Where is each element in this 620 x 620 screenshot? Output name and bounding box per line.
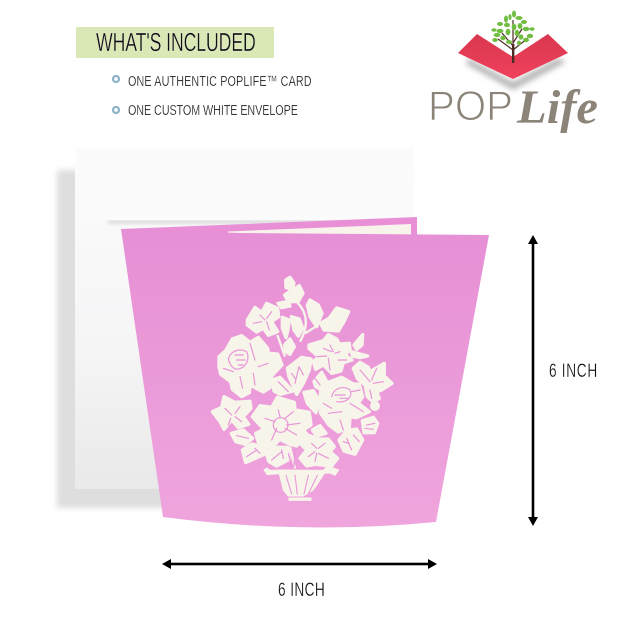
flower: bottom right: [300, 436, 338, 466]
envelope shadow: [57, 170, 397, 508]
arrow: width: [162, 559, 437, 569]
label: width 6 inch: 6 INCH: [278, 579, 325, 601]
right bud and leaf: [339, 417, 378, 454]
flower: far right: [353, 362, 392, 409]
flower: top left: [247, 303, 279, 335]
list item: envelope: ONE CUSTOM WHITE ENVELOPE: [128, 101, 298, 118]
rose: left: [219, 336, 282, 397]
envelope: [75, 147, 414, 489]
big flower: bottom centre: [252, 397, 311, 448]
label: height 6 inch: 6 INCH: [549, 360, 597, 382]
flower: left bottom: [212, 397, 251, 429]
heading: what's included: WHAT'S INCLUDED: [96, 28, 256, 57]
stems: [277, 302, 318, 468]
bouquet cut lines: [223, 312, 383, 494]
centre leaves: [272, 357, 328, 413]
list item: card: ONE AUTHENTIC POPLIFE™ CARD: [128, 72, 312, 89]
logo shadow: [466, 58, 566, 90]
floral bouquet cutout: [212, 277, 392, 500]
lower leaves: [231, 426, 326, 466]
logo wordmark: POP: [428, 82, 513, 129]
arrow: height: [528, 235, 538, 526]
card inner paper: [228, 224, 411, 238]
logo tree: [491, 10, 535, 63]
top bud: [278, 277, 303, 308]
rose: right: [319, 377, 369, 432]
flower: right top: [309, 335, 368, 373]
logo: PopLife: Life: [516, 81, 598, 134]
upper leaves: [282, 300, 349, 354]
logo open book: [458, 34, 568, 79]
card front: [121, 229, 489, 527]
logo: PopLife: [428, 10, 598, 134]
envelope flap: [77, 148, 413, 220]
card back panel: [121, 217, 417, 238]
vase: [264, 467, 339, 500]
